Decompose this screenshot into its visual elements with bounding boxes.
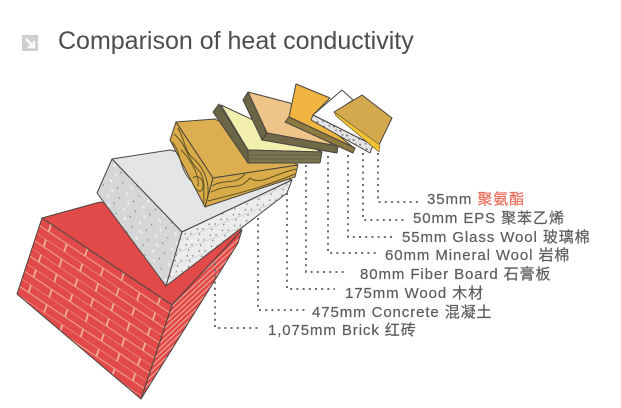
label: 50mm EPS: 50mm EPS 聚苯乙烯	[413, 210, 565, 227]
diagram: stacked insulation material blocks	[17, 84, 392, 399]
icon: title arrow bullet	[22, 35, 38, 51]
label: 35mm polyurethane: 35mm 聚氨酯	[427, 191, 525, 208]
label: 60mm mineral wool: 60mm Mineral Wool 岩棉	[385, 247, 570, 264]
leader: 80mm	[306, 165, 347, 272]
label: 80mm fiber board: 80mm Fiber Board 石膏板	[360, 265, 551, 283]
block: 80mm fiber board	[213, 104, 322, 163]
label: 55mm glass wool: 55mm Glass Wool 玻璃棉	[402, 229, 591, 246]
leader: 55mm	[348, 155, 396, 237]
leader: 60mm	[328, 156, 378, 253]
leader: 475mm	[258, 218, 305, 310]
block: 475mm concrete	[97, 150, 292, 286]
leader: 175mm	[287, 193, 335, 289]
label: 475mm concrete: 475mm Concrete 混凝土	[312, 304, 492, 321]
block: 1,075mm brick	[17, 202, 242, 399]
block: 175mm wood	[170, 119, 298, 207]
label: 1,075mm brick: 1,075mm Brick 红砖	[268, 322, 417, 339]
block: 35mm polyurethane	[334, 95, 392, 152]
leader: 1,075mm	[215, 263, 260, 328]
leader: 35mm	[378, 153, 418, 202]
label: 175mm wood: 175mm Wood 木材	[345, 285, 484, 302]
block: 55mm glass wool	[285, 84, 355, 153]
leader: 50mm	[363, 153, 407, 220]
title: Comparison of heat conductivity	[58, 27, 414, 55]
block: 60mm mineral wool	[243, 92, 338, 153]
block: 50mm EPS	[311, 90, 373, 153]
